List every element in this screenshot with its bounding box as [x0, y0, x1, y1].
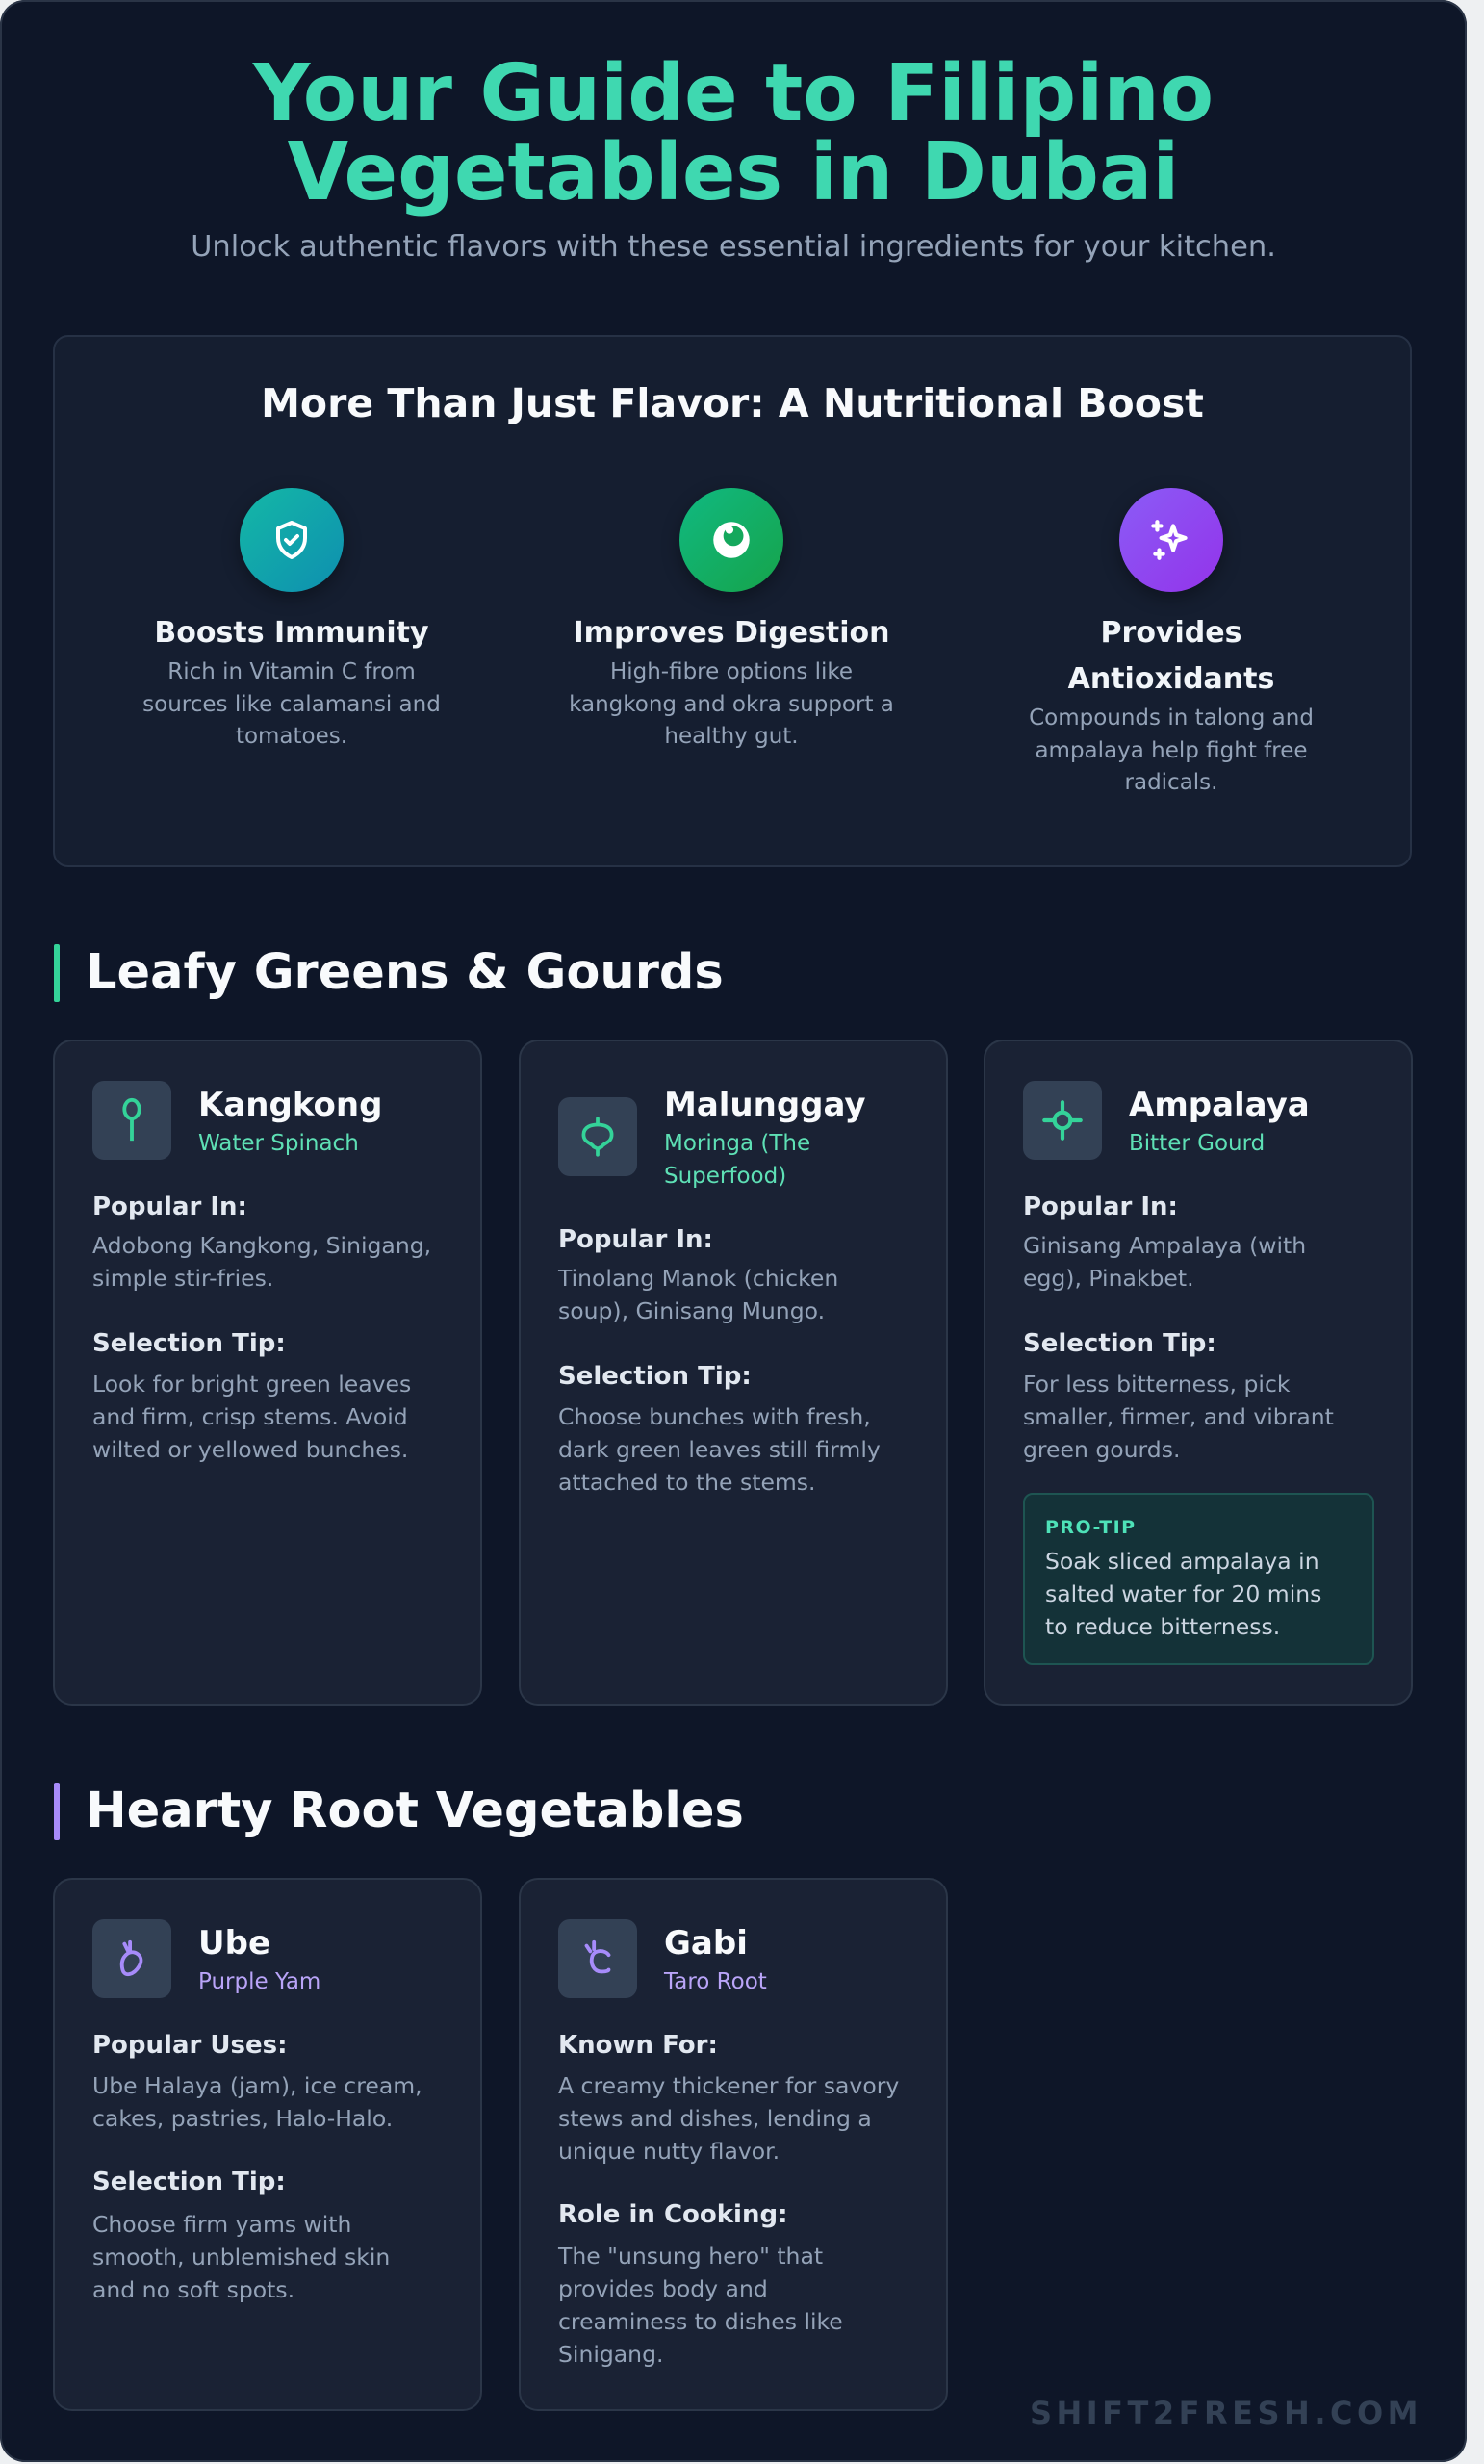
benefit: antioxidants: Compounds in talong and	[1029, 706, 1314, 731]
card: malunggay: Choose bunches with fresh,	[558, 1403, 871, 1430]
card: malunggay: dark green leaves still firmly	[558, 1436, 881, 1463]
card: ube: Purple Yam	[198, 1969, 320, 1994]
card: ube: and no soft spots.	[92, 2276, 294, 2303]
card: kangkong: Look for bright green leaves	[92, 1371, 411, 1398]
benefit: immunity: sources like calamansi and	[142, 691, 441, 716]
icon: malunggay	[558, 1097, 637, 1176]
card: gabi: provides body and	[558, 2275, 768, 2302]
icon: stomach	[679, 488, 783, 592]
card: ampalaya	[984, 1040, 1413, 1706]
card: kangkong	[53, 1040, 482, 1706]
icon: ube	[92, 1919, 171, 1998]
icon: shield	[240, 488, 344, 592]
card: ube: cakes, pastries, Halo-Halo.	[92, 2105, 393, 2132]
benefit: digestion	[569, 488, 894, 749]
card: kangkong: wilted or yellowed bunches.	[92, 1436, 408, 1463]
benefit: antioxidants: ampalaya help fight free	[1035, 737, 1308, 762]
card: malunggay: Popular In:	[558, 1225, 713, 1254]
section heading: roots: Hearty Root Vegetables	[86, 1783, 744, 1839]
card: gabi: unique nutty flavor.	[558, 2138, 780, 2165]
card: ampalaya: Ginisang Ampalaya (with	[1023, 1232, 1306, 1259]
icon: ampalaya	[1023, 1081, 1102, 1160]
benefit: immunity: Rich in Vitamin C from	[167, 659, 416, 684]
icon: gabi	[558, 1919, 637, 1998]
card: kangkong: Water Spinach	[198, 1131, 359, 1156]
benefit: antioxidants	[1029, 488, 1314, 795]
card: malunggay: Malunggay	[664, 1086, 866, 1124]
card: kangkong: and firm, crisp stems. Avoid	[92, 1403, 408, 1430]
card: malunggay: Superfood)	[664, 1164, 786, 1189]
card: gabi: Gabi	[664, 1924, 748, 1963]
card: malunggay	[519, 1040, 948, 1706]
card: ube: Choose firm yams with	[92, 2211, 351, 2238]
title: Vegetables in Dubai	[288, 127, 1179, 218]
card: gabi: Sinigang.	[558, 2341, 663, 2368]
benefit: digestion: healthy gut.	[664, 724, 799, 749]
title: Your Guide to Filipino	[253, 48, 1214, 140]
panel: nutritional boost	[53, 335, 1412, 867]
benefit: immunity	[142, 488, 441, 749]
card: kangkong: simple stir-fries.	[92, 1265, 273, 1292]
card: ube: Popular Uses:	[92, 2031, 287, 2060]
card: kangkong: Adobong Kangkong, Sinigang,	[92, 1232, 431, 1259]
callout: pro-tip	[1023, 1493, 1374, 1665]
card: gabi: A creamy thickener for savory	[558, 2072, 899, 2099]
callout: pro-tip: PRO-TIP	[1045, 1517, 1137, 1538]
panel heading: More Than Just Flavor: A Nutritional Boost	[261, 380, 1204, 426]
benefit: digestion: Improves Digestion	[574, 616, 889, 650]
benefit: digestion: High-fibre options like	[610, 659, 853, 684]
card: ampalaya: For less bitterness, pick	[1023, 1371, 1290, 1398]
benefit: immunity: tomatoes.	[236, 724, 347, 749]
card: gabi: stews and dishes, lending a	[558, 2105, 872, 2132]
card: gabi: The "unsung hero" that	[558, 2243, 823, 2270]
card: ube: smooth, unblemished skin	[92, 2244, 390, 2271]
benefit: antioxidants: Antioxidants	[1068, 662, 1274, 696]
subtitle: Unlock authentic flavors with these essential ingredients for your kitchen.	[191, 230, 1276, 264]
icon: sparkles	[1119, 488, 1223, 592]
card: gabi: Known For:	[558, 2031, 718, 2060]
card: ube	[53, 1878, 482, 2411]
card: gabi: Role in Cooking:	[558, 2200, 787, 2229]
card: kangkong: Selection Tip:	[92, 1329, 286, 1358]
callout: pro-tip: to reduce bitterness.	[1045, 1613, 1280, 1640]
card: ampalaya: Popular In:	[1023, 1193, 1178, 1221]
benefit: antioxidants: radicals.	[1125, 770, 1217, 795]
callout: pro-tip: Soak sliced ampalaya in	[1045, 1548, 1319, 1575]
card: gabi: Taro Root	[664, 1969, 767, 1994]
benefit: antioxidants: Provides	[1101, 616, 1241, 650]
callout: pro-tip: salted water for 20 mins	[1045, 1580, 1321, 1607]
card: ampalaya: smaller, firmer, and vibrant	[1023, 1403, 1334, 1430]
card: gabi: creaminess to dishes like	[558, 2308, 843, 2335]
card: ube: Selection Tip:	[92, 2168, 286, 2196]
card: kangkong: Popular In:	[92, 1193, 247, 1221]
card: kangkong: Kangkong	[198, 1086, 382, 1124]
card: ampalaya: egg), Pinakbet.	[1023, 1265, 1194, 1292]
benefit: digestion: kangkong and okra support a	[569, 691, 894, 716]
benefit: immunity: Boosts Immunity	[154, 616, 429, 650]
card: malunggay: Tinolang Manok (chicken	[558, 1265, 838, 1292]
section heading: leafy greens: Leafy Greens & Gourds	[86, 944, 724, 1001]
footer brand: SHIFT2FRESH.COM	[1030, 2395, 1422, 2431]
card: ampalaya: green gourds.	[1023, 1436, 1180, 1463]
icon: kangkong	[92, 1081, 171, 1160]
title	[252, 48, 1214, 218]
card: ampalaya: Ampalaya	[1129, 1086, 1310, 1124]
card: malunggay: Selection Tip:	[558, 1362, 752, 1391]
card: malunggay: attached to the stems.	[558, 1469, 816, 1496]
card: ampalaya: Selection Tip:	[1023, 1329, 1216, 1358]
card: gabi	[519, 1878, 948, 2411]
card: malunggay: soup), Ginisang Mungo.	[558, 1297, 825, 1324]
card: malunggay: Moringa (The	[664, 1131, 810, 1156]
card: ube: Ube	[198, 1924, 270, 1963]
card: ube: Ube Halaya (jam), ice cream,	[92, 2072, 422, 2099]
card: ampalaya: Bitter Gourd	[1129, 1131, 1265, 1156]
